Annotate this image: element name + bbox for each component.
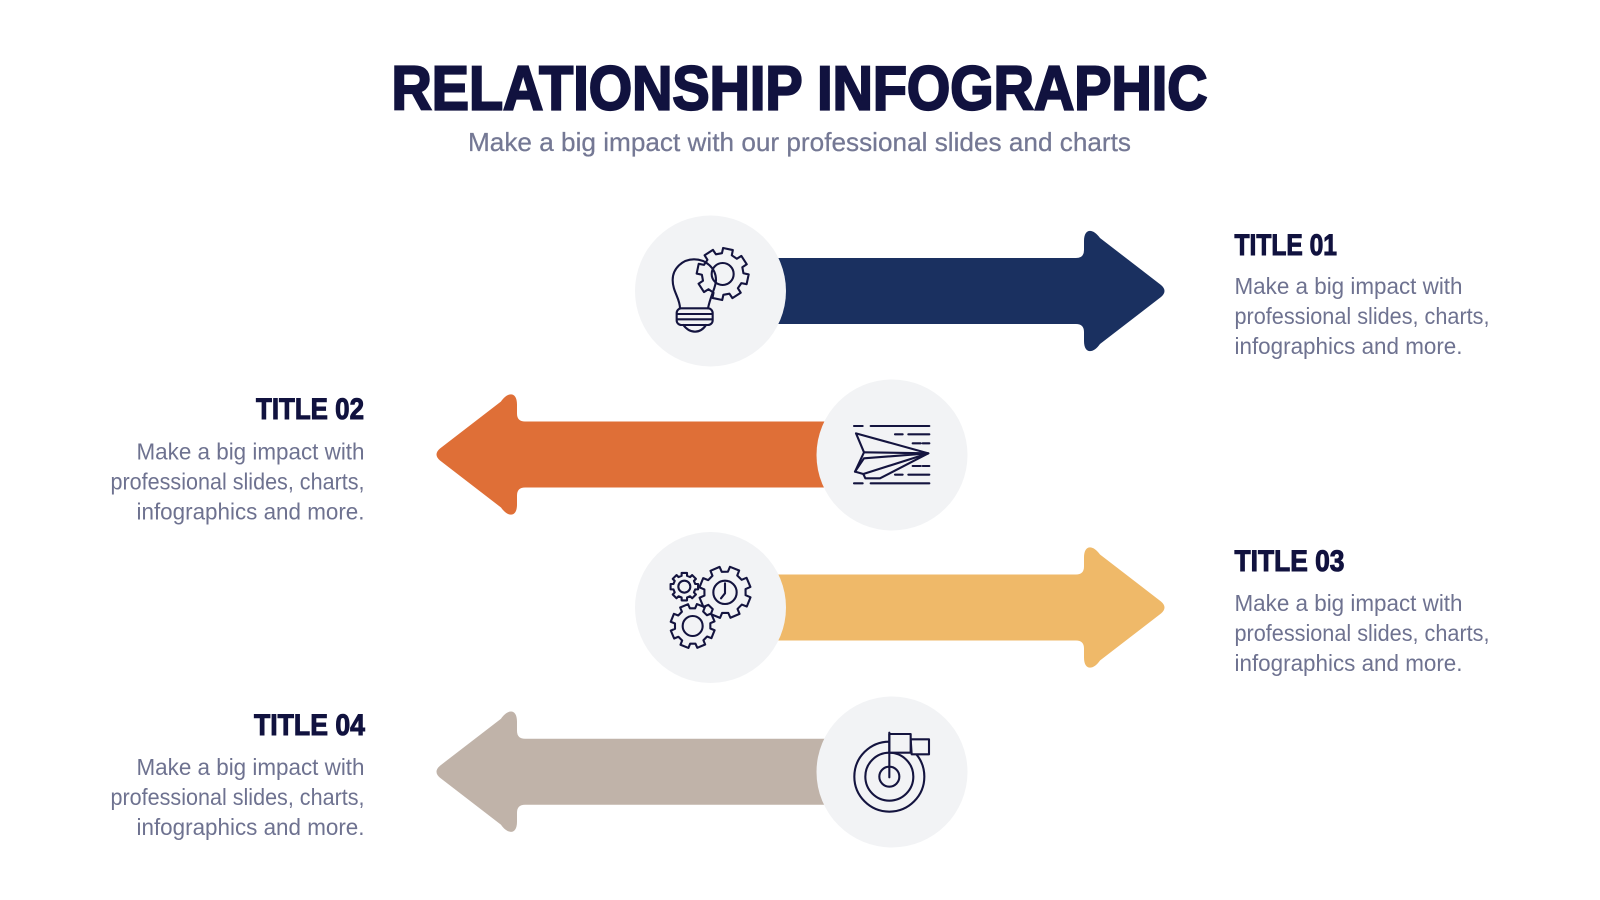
- heading 4: TITLE 04: [254, 709, 366, 742]
- arrow 2: [436, 394, 841, 515]
- body 4: professional slides, charts,: [110, 784, 364, 810]
- body 3: professional slides, charts,: [1234, 620, 1490, 646]
- body 1: [1234, 273, 1490, 359]
- body 1: professional slides, charts,: [1234, 303, 1490, 329]
- row 3: yellow arrow right: [635, 532, 1490, 683]
- body 3: [1234, 590, 1490, 676]
- heading 1: TITLE 01: [1234, 229, 1337, 262]
- body 2: professional slides, charts,: [110, 468, 364, 494]
- body 4: [110, 754, 364, 840]
- heading 2: TITLE 02: [256, 393, 364, 426]
- body 2: [110, 438, 364, 524]
- text block 3: [1234, 545, 1490, 676]
- icon: target with flag: [854, 733, 929, 812]
- row 4: taupe arrow left: [110, 696, 968, 848]
- icon circle 3: [635, 532, 786, 683]
- body 4: Make a big impact with: [136, 754, 364, 780]
- body 1: Make a big impact with: [1234, 273, 1462, 299]
- title: RELATIONSHIP INFOGRAPHIC: [392, 54, 1208, 124]
- row 1: navy arrow right: [635, 216, 1490, 366]
- icon: light bulb with gear: [673, 244, 753, 332]
- body 4: infographics and more.: [136, 814, 364, 840]
- body 3: Make a big impact with: [1234, 590, 1462, 616]
- icon circle 2: [816, 380, 968, 530]
- heading 3: TITLE 03: [1234, 545, 1344, 578]
- body 1: infographics and more.: [1234, 333, 1462, 359]
- text block 1: [1234, 229, 1490, 359]
- icon: three gears with clock: [664, 559, 758, 655]
- icon circle 1: [635, 216, 786, 366]
- row 2: orange arrow left: [110, 380, 968, 530]
- arrow 3: [760, 547, 1164, 668]
- text block 4: [110, 709, 366, 840]
- text block 2: [110, 393, 364, 524]
- arrow 1: [760, 231, 1164, 351]
- icon: paper plane: [854, 426, 929, 483]
- icon circle 4: [816, 696, 968, 848]
- subtitle: Make a big impact with our professional slides and charts: [468, 127, 1131, 157]
- body 3: infographics and more.: [1234, 650, 1462, 676]
- arrow 4: [436, 712, 841, 832]
- header: [392, 54, 1208, 157]
- body 2: Make a big impact with: [136, 438, 364, 464]
- body 2: infographics and more.: [136, 498, 364, 524]
